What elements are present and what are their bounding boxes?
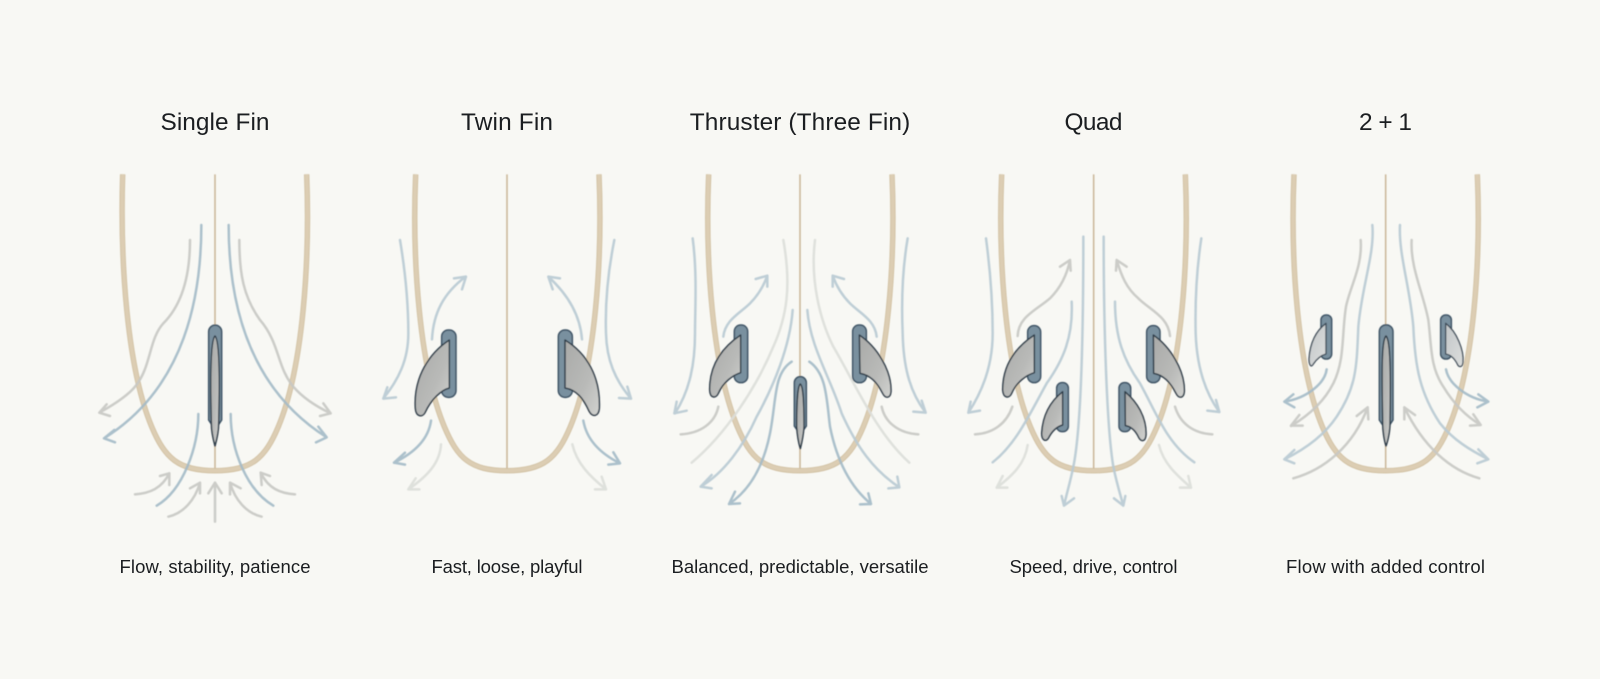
panel: 2 + 1 [1284,109,1488,577]
fin: left [710,325,748,397]
fin: left small [1042,383,1068,440]
fin: right [558,330,599,415]
diagram: single fin board [99,174,331,522]
flow arrows [1284,225,1488,478]
panel: Quad [968,109,1219,577]
fin: right large [1147,326,1184,397]
heading: Quad: Quad [1064,109,1122,136]
caption: Quad: Speed, drive, control [1010,556,1178,577]
heading: 2 + 1: 2 + 1 [1359,109,1412,136]
flow arrows [99,225,331,522]
flow arrows [968,237,1219,506]
fin: left small [1309,315,1332,366]
diagram: twin fin board [383,174,631,489]
diagram: quad board [968,174,1219,506]
panel: Twin Fin [383,109,631,577]
heading: Twin Fin: Twin Fin [461,109,553,136]
fin: center [209,325,222,446]
caption: Single Fin: Flow, stability, patience [120,556,310,577]
flow arrows [674,238,926,504]
caption: 2 + 1: Flow with added control [1286,556,1485,577]
fin: right small [1119,383,1146,441]
heading: Single Fin: Single Fin [160,109,270,136]
fin: right [853,325,891,397]
fin: center [794,377,806,449]
board outline [1293,174,1478,471]
diagram: 2+1 board [1284,174,1488,478]
fin: center [1379,325,1393,446]
board outline [1001,174,1186,471]
panel: Single Fin [99,109,331,577]
diagram: thruster board [674,174,926,504]
fin: right small [1441,315,1463,367]
board outline [415,174,600,471]
board outline [122,174,307,471]
heading: Thruster (Three Fin): Thruster (Three Fin) [690,109,910,136]
caption: Thruster: Balanced, predictable, versatile [672,556,928,577]
panel: Thruster [672,109,928,577]
board outline [708,174,893,471]
flow arrows [383,240,631,489]
fin: left [415,330,456,416]
fin: left large [1003,326,1041,397]
caption: Twin Fin: Fast, loose, playful [432,556,582,577]
